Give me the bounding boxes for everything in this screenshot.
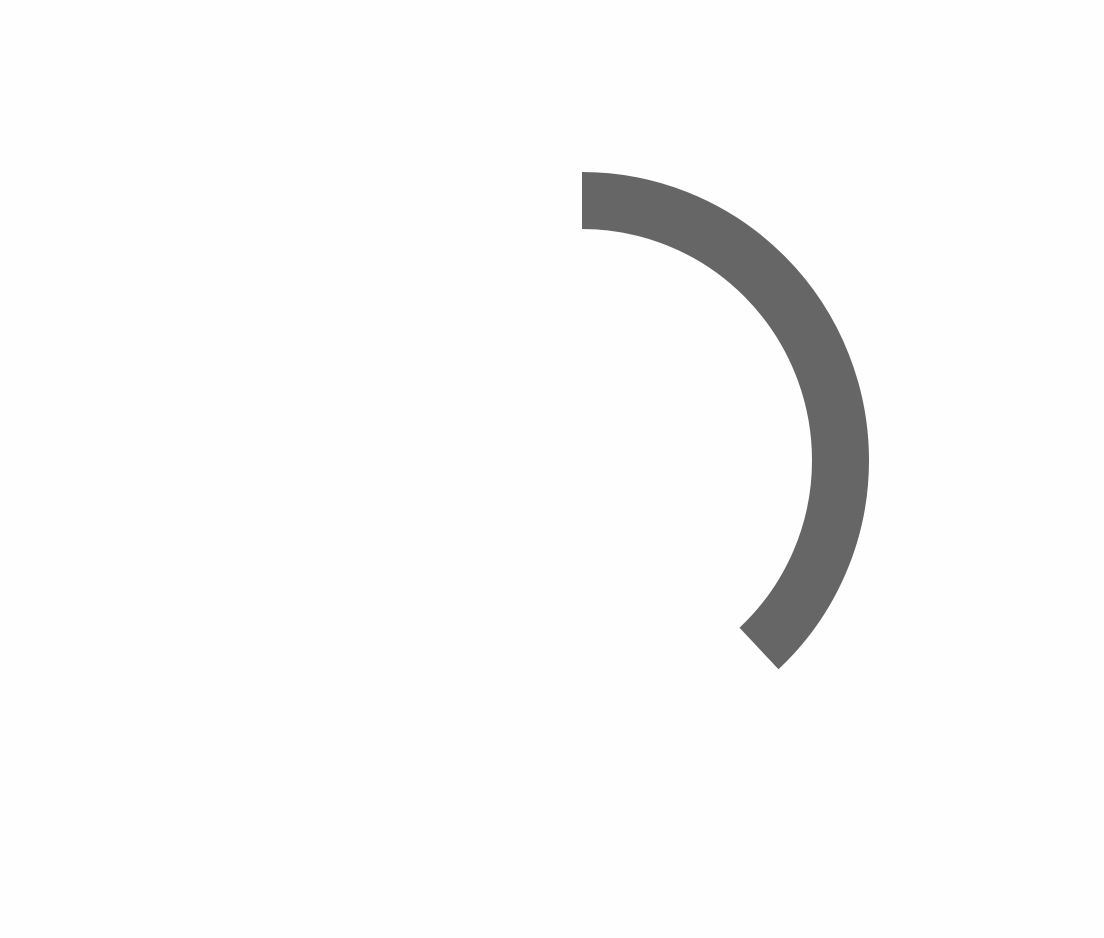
arc segment	[582, 200, 840, 648]
